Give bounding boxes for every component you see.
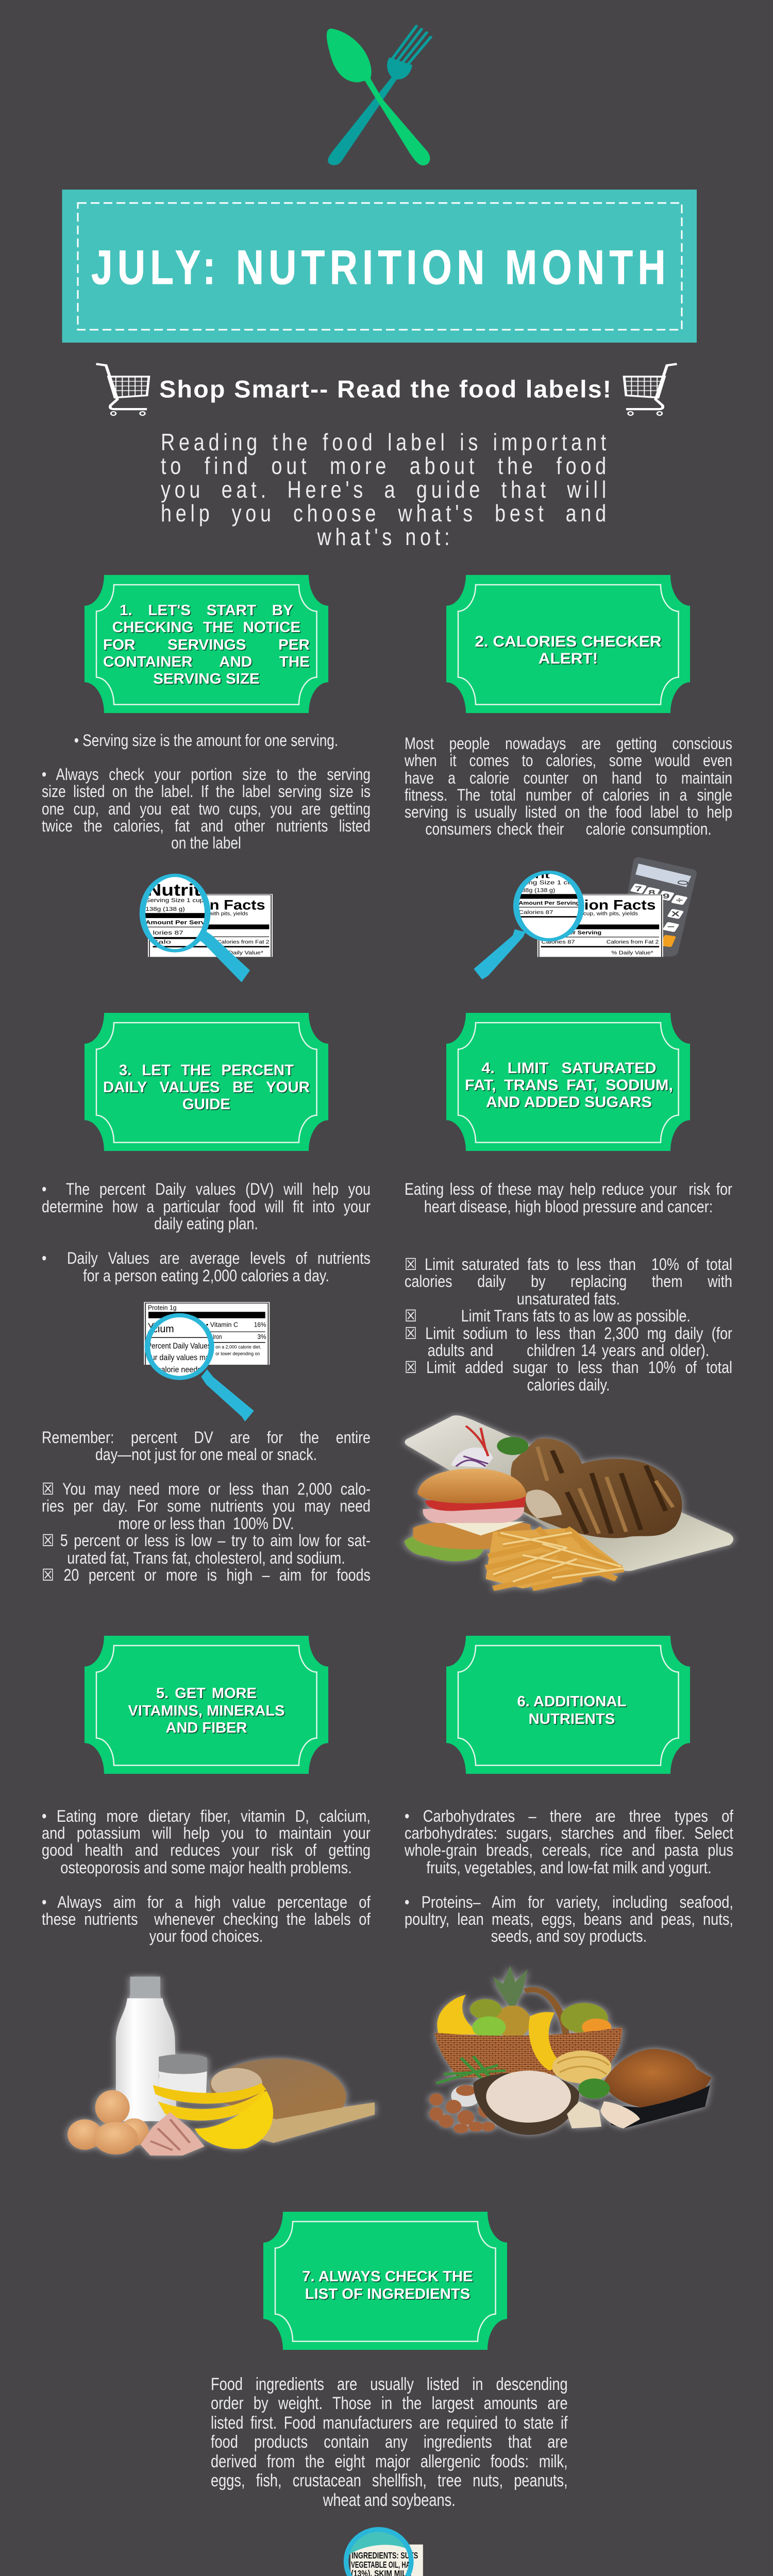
icon: left shopping cart <box>96 364 149 415</box>
illustration: percent daily value label with magnifier: lcium <box>150 1323 174 1335</box>
illustration: calculator and nutrition label with magnifier <box>474 857 697 979</box>
text block: limit intro <box>404 1180 732 1216</box>
text block: serving size: size listed on the label. If the label serving size is <box>42 782 371 801</box>
text block: calories: serving is usually listed on the food label to help <box>404 803 732 821</box>
text block: serving size: twice the calories, fat and other nutrients listed <box>42 817 371 835</box>
text block: limit list: unsaturated fats. <box>516 1290 620 1308</box>
title banner <box>62 190 697 343</box>
illustration: nutrition label with magnifier: Amount Per Servi <box>145 919 207 926</box>
illustration: percent daily value label with magnifier: 16% <box>254 1321 266 1329</box>
text block: vitamins and fiber: • Eating more dietary fiber, vitamin D, calcium, <box>42 1807 371 1825</box>
intro paragraph: what's not: <box>317 523 453 550</box>
illustration: calculator and nutrition label with magnifier: Calories 87 <box>541 939 575 945</box>
icon: calculator <box>621 857 697 957</box>
text block: calories <box>404 734 732 838</box>
illustration: percent daily value label with magnifier: Percent Daily Values <box>147 1341 211 1350</box>
illustration: percent daily value label with magnifier: our daily values ma <box>147 1353 210 1362</box>
text block: calories: consumers check their calorie consumption. <box>425 820 711 838</box>
text block: calories: have a calorie counter on hand to maintain <box>404 769 732 787</box>
text block: remember percent DV: ☒ 20 percent or more is high – aim for foods <box>42 1566 371 1584</box>
text block: additional nutrients: whole-grain breads, cereals, rice and pasta plus <box>405 1841 733 1859</box>
text block: additional nutrients: fruits, vegetables, and low-fat milk and yogurt. <box>427 1858 712 1877</box>
illustration: ingredients list with magnifier <box>346 2530 453 2576</box>
text block: ingredients: listed first. Food manufacturers are required to state if <box>211 2413 568 2433</box>
illustration: calculator and nutrition label with magnifier: ion Facts <box>584 897 656 913</box>
text block: vitamins and fiber <box>42 1807 371 1945</box>
panel heading: step 2 <box>446 575 690 713</box>
text block: additional nutrients: • Proteins– Aim for variety, including seafood, <box>405 1893 733 1911</box>
illustration: calculator and nutrition label with magnifier: Amount Per Serving <box>518 901 580 906</box>
panel heading: step 5: VITAMINS, MINERALS <box>128 1703 284 1719</box>
illustration: calculator and nutrition label with magnifier: Calories 87 <box>518 909 553 916</box>
text block: calories: Most people nowadays are getting conscious <box>404 734 732 753</box>
text block: remember percent DV: ☒ You may need more or less than 2,000 calo- <box>42 1480 371 1498</box>
panel heading: step 5: 5. GET MORE <box>156 1685 257 1702</box>
illustration: percent daily value label with magnifier: Protein 1g <box>148 1304 176 1312</box>
text block: ingredients: order by weight. Those in the largest amounts are <box>211 2394 568 2413</box>
panel heading: step 1: SERVING SIZE <box>153 671 260 687</box>
text block: vitamins and fiber: your food choices. <box>149 1927 263 1945</box>
text block: ingredients: eggs, fish, crustacean shellfish, tree nuts, peanuts, <box>211 2471 568 2490</box>
illustration: percent daily value label with magnifier: • Vitamin C <box>206 1321 238 1329</box>
text block: remember percent DV: Remember: percent DV are for the entire <box>42 1428 371 1447</box>
text block: additional nutrients: carbohydrates: sugars, starches and fiber. Select <box>405 1824 733 1842</box>
illustration: percent daily value label with magnifier: 3% <box>257 1333 266 1341</box>
icon: calculator: 8 <box>648 889 656 896</box>
illustration: nutrition label with magnifier: Nutriti <box>147 880 206 900</box>
illustration: calculator and nutrition label with magnifier: % Daily Value* <box>611 950 653 956</box>
illustration: ingredients list with magnifier: INGREDIENTS: SUTS <box>351 2550 418 2561</box>
panel heading: step 6: 6. ADDITIONAL <box>517 1693 627 1710</box>
text block: serving size: • Always check your portion size to the serving <box>42 765 371 784</box>
text block: ingredients: derived from the eight major allergenic foods: milk, <box>211 2452 568 2471</box>
icon: calculator: X <box>671 910 680 918</box>
text block: percent daily values: daily eating plan. <box>154 1214 258 1233</box>
text block: vitamins and fiber: osteoporosis and some major health problems. <box>60 1858 352 1877</box>
text block: limit list: ☒ Limit added sugar to less than 10% of total <box>404 1358 732 1377</box>
illustration: calculator and nutrition label with magnifier: er Serving <box>569 930 601 936</box>
panel heading: step 5 <box>85 1636 328 1774</box>
text block: additional nutrients: seeds, and soy products. <box>491 1927 647 1945</box>
panel heading: step 1: CONTAINER AND THE <box>103 654 310 670</box>
text block: limit list: Limit Trans fats to as low as possible. <box>461 1307 690 1325</box>
illustration: nutrition label with magnifier: Daily Value* <box>228 950 263 956</box>
text block: limit list: ☒ <box>404 1307 417 1325</box>
panel heading: step 1: FOR SERVINGS PER <box>103 637 310 653</box>
icon: calculator: 0 <box>674 879 692 886</box>
panel heading: step 7: 7. ALWAYS CHECK THE <box>302 2268 473 2285</box>
text block: ingredients: Food ingredients are usually listed in descending <box>211 2375 568 2394</box>
icon: right shopping cart <box>624 364 677 415</box>
illustration: nutrition label with magnifier: n Facts <box>210 897 265 913</box>
panel heading: step 4 <box>446 1013 690 1151</box>
panel heading: step 1: 1. LET'S START BY <box>120 602 293 619</box>
intro paragraph <box>161 429 610 550</box>
panel heading: step 7 <box>263 2212 507 2350</box>
intro paragraph: to find out more about the food <box>161 452 610 479</box>
text block: percent daily values: • Daily Values are average levels of nutrients <box>42 1249 371 1267</box>
panel heading: step 7: LIST OF INGREDIENTS <box>305 2286 470 2302</box>
illustration: calculator and nutrition label with magnifier: ving Size 1 cu <box>523 879 572 886</box>
panel heading: step 6 <box>446 1636 690 1774</box>
panel heading: step 6: NUTRIENTS <box>529 1711 615 1727</box>
illustration: calculator and nutrition label with magnifier: cup, with pits, yields <box>583 911 638 917</box>
text block: vitamins and fiber: good health and reduces your risk of getting <box>42 1841 371 1859</box>
intro paragraph: help you choose what's best and <box>161 500 610 527</box>
text block: percent daily values <box>42 1180 371 1285</box>
illustration: calculator and nutrition label with magnifier: 38g (138 g) <box>522 887 555 893</box>
panel heading: step 4: AND ADDED SUGARS <box>486 1094 652 1111</box>
text block: additional nutrients: poultry, lean meats, eggs, beans and peas, nuts, <box>405 1910 733 1928</box>
text block: limit list: calories daily. <box>527 1376 610 1394</box>
illustration: ingredients list with magnifier: VEGETABLE OIL, HA <box>351 2560 410 2570</box>
text block: remember percent DV <box>42 1428 371 1584</box>
text block: percent daily values: for a person eating 2,000 calories a day. <box>83 1266 329 1285</box>
illustration: nutrition label with magnifier: lories 87 <box>153 929 183 936</box>
text block: limit list: ☒ Limit sodium to less than 2,300 mg daily (for <box>404 1324 732 1343</box>
panel heading: step 5: AND FIBER <box>166 1720 247 1736</box>
illustration: percent daily value label with magnifier: on a 2,000 calorie diet. <box>215 1345 261 1350</box>
text block: remember percent DV: day—not just for one meal or snack. <box>95 1445 317 1464</box>
text block: remember percent DV: ries per day. For some nutrients you may need <box>42 1497 371 1515</box>
text block: serving size: one cup, and you eat two cups, you are getting <box>42 800 371 818</box>
photo illustration: burger, fries and chicken on a plate <box>404 1415 733 1588</box>
intro paragraph: Reading the food label is important <box>161 429 610 455</box>
text block: limit intro: heart disease, high blood pressure and cancer: <box>424 1197 713 1216</box>
text block: limit intro: Eating less of these may help reduce your risk for <box>404 1180 732 1198</box>
icon: calculator: − <box>667 923 675 931</box>
illustration: percent daily value label with magnifier: r calorie needs <box>153 1365 201 1374</box>
panel heading: step 2: 2. CALORIES CHECKER <box>475 633 662 650</box>
text block: vitamins and fiber: • Always aim for a high value percentage of <box>42 1893 371 1911</box>
panel heading: step 4: FAT, TRANS FAT, SODIUM, <box>465 1077 673 1094</box>
text block: remember percent DV: more or less than 100% DV. <box>118 1514 294 1533</box>
subheading: Shop Smart-- Read the food labels! <box>159 376 612 403</box>
panel heading: step 1 <box>85 575 328 713</box>
text block: remember percent DV: urated fat, Trans fat, cholesterol, and sodium. <box>67 1549 345 1567</box>
icon: calculator: ÷ <box>676 896 683 904</box>
illustration: calculator and nutrition label with magnifier: Calories from Fat 2 <box>607 939 659 945</box>
panel heading: step 3: DAILY VALUES BE YOUR <box>103 1079 310 1096</box>
text block: limit list: ☒ Limit saturated fats to less than 10% of total <box>404 1255 732 1274</box>
text block: vitamins and fiber: these nutrients whenever checking the labels of <box>42 1910 371 1928</box>
illustration: nutrition label with magnifier: with pits, yields <box>209 911 248 917</box>
intro paragraph: you eat. Here's a guide that will <box>161 476 610 503</box>
illustration: calculator and nutrition label with magnifier: trit <box>530 871 550 880</box>
panel heading: step 1: CHECKING THE NOTICE <box>112 619 300 636</box>
text block: limit list: calories daily by replacing them with <box>404 1272 732 1291</box>
text block: additional nutrients: • Carbohydrates – there are three types of <box>405 1807 733 1825</box>
panel heading: step 2: ALERT! <box>539 650 598 667</box>
text block: percent daily values: determine how a particular food will fit into your <box>42 1197 371 1216</box>
illustration: percent daily value label with magnifier: or lower depending on <box>215 1352 260 1357</box>
illustration: nutrition label with magnifier: Calo <box>152 939 171 945</box>
text block: ingredients: wheat and soybeans. <box>323 2490 456 2510</box>
panel heading: step 3 <box>85 1013 328 1151</box>
text block: vitamins and fiber: and potassium will help you to maintain your <box>42 1824 371 1842</box>
text block: serving size: • Serving size is the amount for one serving. <box>74 731 338 749</box>
illustration: nutrition label with magnifier: Calories from Fat 2 <box>217 939 269 945</box>
photo illustration: fruit basket, rice, chicken, almonds <box>429 1966 712 2135</box>
illustration: nutrition label with magnifier: Serving Size 1 cup, <box>145 897 206 904</box>
text block: limit list <box>404 1255 732 1394</box>
text block: ingredients <box>211 2375 568 2510</box>
text block: serving size <box>42 731 371 852</box>
text block: serving size: on the label <box>171 834 241 852</box>
panel heading: step 4: 4. LIMIT SATURATED <box>481 1060 657 1077</box>
text block: limit list: adults and children 14 years and older). <box>427 1341 709 1360</box>
panel heading: step 3: 3. LET THE PERCENT <box>119 1062 294 1079</box>
text block: ingredients: food products contain any ingredients that are <box>211 2432 568 2452</box>
panel heading: step 3: GUIDE <box>182 1096 230 1113</box>
illustration: nutrition label with magnifier: 138g (138 g) <box>145 906 185 912</box>
text block: percent daily values: • The percent Daily values (DV) will help you <box>42 1180 371 1198</box>
text block: calories: fitness. The total number of calories in a single <box>404 786 732 804</box>
icon: calculator: 9 <box>663 892 669 901</box>
text block: remember percent DV: ☒ 5 percent or less is low – try to aim low for sat- <box>42 1531 371 1550</box>
illustration: percent daily value label with magnifier: Vi <box>148 1322 156 1329</box>
photo illustration: milk, eggs, bananas, bread <box>68 1977 375 2156</box>
text block: calories: when it comes to calories, some would even <box>404 751 732 770</box>
icon: calculator: 7 <box>635 885 642 893</box>
illustration: percent daily value label with magnifier: Iron <box>213 1333 222 1341</box>
text block: additional nutrients <box>405 1807 733 1945</box>
illustration: percent daily value label with magnifier <box>144 1302 270 1421</box>
icon: crossed fork and spoon <box>327 26 431 165</box>
illustration: nutrition label with magnifier <box>141 875 273 982</box>
